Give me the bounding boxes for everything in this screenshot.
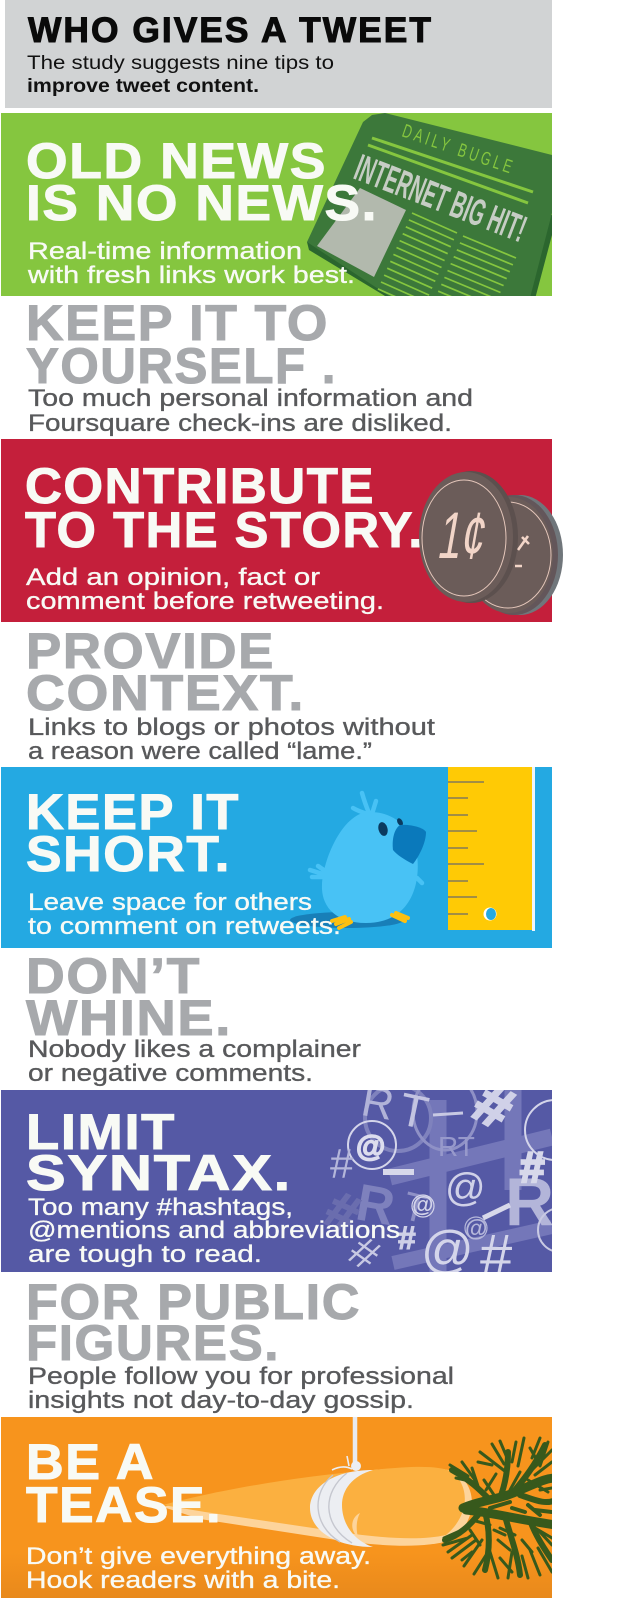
illustration: hashtag and at symbols collage: R (505, 1164, 554, 1240)
heading: for public figures: FOR PUBLIC (26, 1274, 361, 1330)
illustration: hashtag and at symbols collage: # (317, 1180, 368, 1245)
heading: don't whine (26, 948, 232, 1046)
body text (28, 1194, 400, 1268)
icon: ruler (448, 767, 535, 931)
illustration: hashtag and at symbols collage: @ (356, 1130, 385, 1163)
heading: contribute to the story: TO THE STORY. (25, 502, 424, 558)
intro text: improve tweet content. (27, 76, 259, 97)
body text (26, 564, 384, 615)
body text: Hook readers with a bite. (26, 1567, 340, 1594)
heading: provide context (26, 623, 305, 721)
body text: People follow you for professional (28, 1363, 454, 1390)
panel: be a tease (1, 1410, 556, 1598)
heading: provide context: PROVIDE (26, 623, 275, 679)
illustration: hashtag and at symbols collage: # (480, 1223, 512, 1288)
heading: keep it to yourself: KEEP IT TO (26, 295, 329, 351)
body text (27, 238, 355, 289)
body text: Nobody likes a complainer (28, 1036, 361, 1063)
heading: limit syntax: LIMIT (26, 1104, 176, 1160)
heading: don't whine: DON’T (26, 948, 201, 1004)
body text: Don’t give everything away. (26, 1543, 371, 1570)
heading: keep it short: KEEP IT (26, 784, 240, 840)
icon: coins (419, 471, 563, 615)
heading: limit syntax (26, 1104, 292, 1201)
illustration: hashtag and at symbols collage: @ (465, 1215, 487, 1241)
body text: are tough to read. (28, 1241, 262, 1268)
body text: with fresh links work best. (27, 262, 355, 289)
heading: contribute to the story: CONTRIBUTE (25, 458, 375, 514)
body text (26, 1543, 371, 1594)
body text: Leave space for others (28, 889, 312, 916)
intro text: The study suggests nine tips to (27, 53, 334, 74)
body text: Add an opinion, fact or (26, 564, 320, 591)
body text: to comment on retweets. (28, 913, 341, 940)
illustration: hashtag and at symbols collage: RT (438, 1131, 475, 1162)
heading: for public figures (26, 1274, 361, 1371)
body text: Too much personal information and (28, 385, 473, 412)
body text: a reason were called “lame.” (28, 738, 372, 765)
illustration: hashtag and at symbols collage: # (330, 1140, 354, 1187)
body text: or negative comments. (28, 1060, 313, 1087)
body text: Too many #hashtags, (28, 1194, 293, 1221)
body text: comment before retweeting. (26, 588, 384, 615)
panel: don't whine (26, 948, 361, 1087)
heading: keep it to yourself: YOURSELF . (26, 338, 337, 394)
body text (28, 385, 473, 437)
icon: newspaper: DAILY BUGLE (399, 121, 518, 179)
heading: who gives a tweet: WHO GIVES A TWEET (28, 11, 433, 50)
body text: insights not day-to-day gossip. (28, 1387, 414, 1414)
illustration: hashtag and at symbols collage: R (352, 1174, 399, 1237)
panel: for public figures (26, 1274, 454, 1414)
illustration: hashtag and at symbols collage: # (520, 1143, 544, 1192)
panel: keep it to yourself (26, 295, 473, 437)
body text (28, 1036, 361, 1087)
heading: be a tease (26, 1434, 222, 1533)
body text (28, 1363, 454, 1414)
icon: bird (290, 793, 426, 928)
illustration: hashtag and at symbols collage: # (340, 1226, 389, 1281)
heading: keep it short (26, 784, 240, 882)
illustration: hashtag and at symbols collage: R (358, 1076, 398, 1130)
body text: Links to blogs or photos without (28, 714, 435, 741)
heading: keep it to yourself (26, 295, 337, 394)
illustration: hashtag and at symbols collage: @ (421, 1221, 474, 1279)
illustration: hashtag and at symbols collage: # (398, 1220, 416, 1256)
heading: limit syntax: SYNTAX. (26, 1145, 292, 1201)
icon: carrot leaves (443, 1438, 556, 1578)
heading: old news is no news: IS NO NEWS. (26, 175, 378, 231)
icon: coins: 1¢ (433, 499, 492, 573)
illustration: hashtag and at symbols collage: # (463, 1070, 524, 1142)
icon: newspaper (307, 113, 552, 316)
panel: contribute to the story (1, 439, 563, 622)
body text: @mentions and abbreviations (28, 1217, 400, 1244)
heading: old news is no news (26, 133, 378, 231)
heading: provide context: CONTEXT. (26, 665, 305, 721)
panel: keep it short (1, 767, 552, 948)
heading: keep it short: SHORT. (26, 826, 231, 882)
illustration: hashtag and at symbols collage: @ (445, 1166, 486, 1210)
panel: provide context (26, 623, 435, 765)
illustration: hashtag and at symbols collage: T (395, 1082, 433, 1139)
body text: Real-time information (28, 238, 302, 265)
illustration: hashtag and at symbols collage (323, 1090, 552, 1272)
illustration: hashtag and at symbols collage: T (398, 1184, 433, 1233)
icon: carrot on a string (163, 1410, 556, 1578)
illustration: hashtag and at symbols collage: @ (412, 1192, 433, 1217)
heading: be a tease: TEASE. (26, 1477, 222, 1533)
heading: don't whine: WHINE. (26, 990, 232, 1046)
heading: for public figures: FIGURES. (26, 1315, 280, 1371)
heading: be a tease: BE A (26, 1434, 155, 1490)
body text (28, 889, 341, 940)
panel: old news is no news (1, 113, 552, 316)
panel: limit syntax (1, 1090, 552, 1272)
body text (28, 714, 435, 765)
heading: old news is no news: OLD NEWS (26, 133, 327, 189)
body text: Foursquare check-ins are disliked. (28, 410, 452, 437)
panel: who gives a tweet header (5, 0, 552, 108)
heading: contribute to the story (25, 458, 424, 558)
intro text (27, 53, 334, 97)
